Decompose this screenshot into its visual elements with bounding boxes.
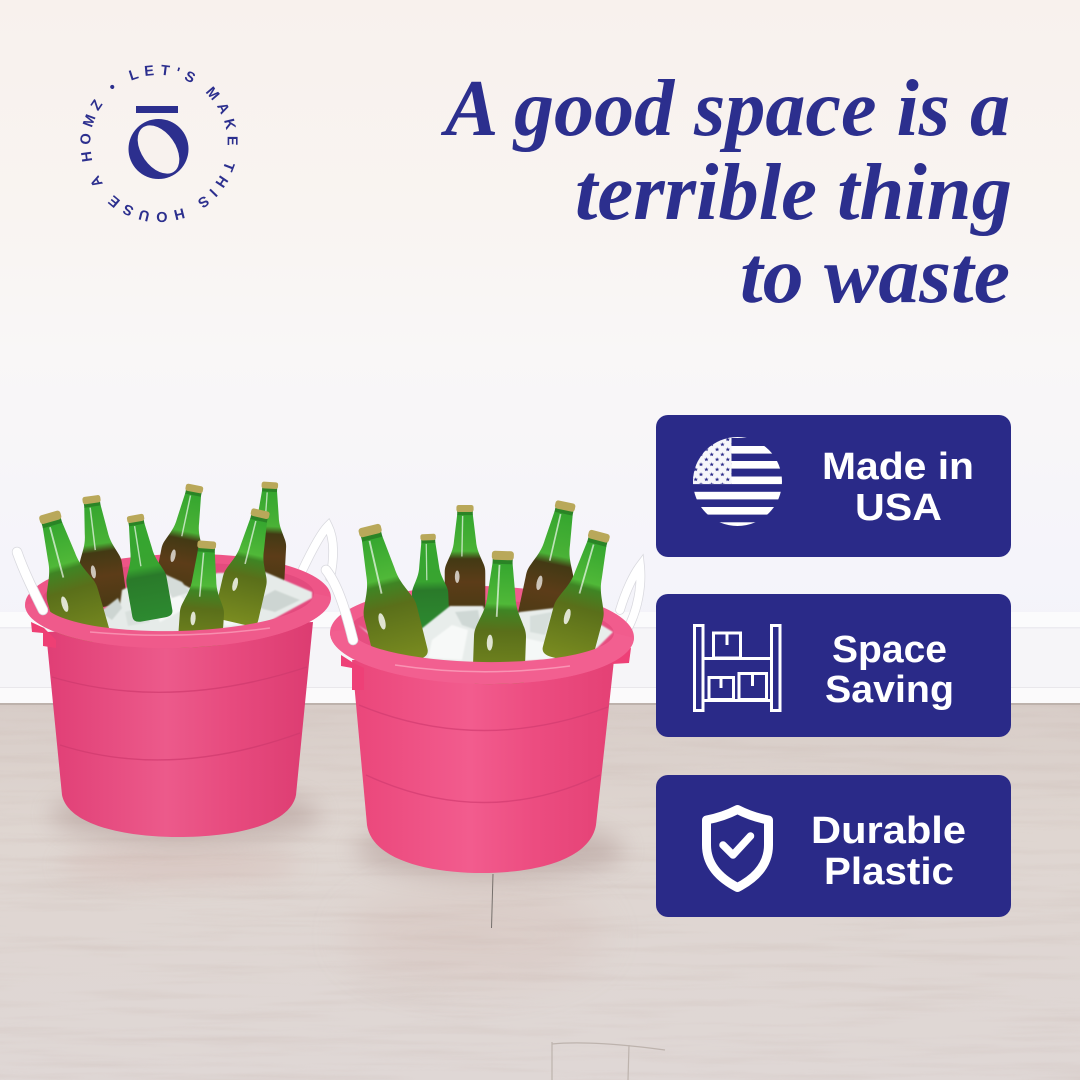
background: wall — [0, 0, 1080, 705]
label: Durable — [811, 810, 966, 852]
label: Saving — [825, 669, 954, 711]
left tub body — [46, 622, 313, 837]
logo letter o — [128, 118, 188, 181]
icon: shelf with boxes — [694, 626, 780, 710]
left tub back bottles — [70, 481, 289, 609]
left tub lug — [31, 622, 56, 648]
left tub rope handle, right — [302, 526, 333, 578]
label: Made in — [822, 446, 974, 488]
panel: Made in USA — [656, 415, 1011, 557]
panel: Durable Plastic — [656, 775, 1011, 917]
label — [825, 629, 954, 711]
headline line 3: to waste — [740, 232, 1010, 320]
right tub front bottles — [358, 524, 610, 684]
icon: US flag — [693, 437, 782, 526]
left tub front bottles — [39, 508, 270, 648]
left tub rim back and interior — [24, 550, 332, 652]
right tub lugs — [341, 648, 631, 690]
left tub bottles and ice — [39, 482, 313, 648]
icon: shield with check — [706, 810, 768, 888]
label — [811, 810, 966, 893]
left tub rope handle, left — [17, 552, 43, 610]
panel: Space Saving — [656, 594, 1011, 737]
left tub rim front — [25, 593, 331, 648]
label: Space — [832, 629, 947, 671]
baseboard — [0, 612, 1080, 704]
right tub with bottles — [326, 497, 640, 873]
label: USA — [855, 487, 942, 529]
right tub rope handle, left — [326, 570, 353, 640]
left tub with bottles — [17, 481, 333, 837]
right tub ice — [358, 606, 613, 664]
right tub rope handle, right — [620, 566, 640, 630]
label — [822, 446, 974, 529]
right tub rim back and interior — [329, 583, 635, 687]
right tub bottles and ice — [358, 500, 614, 684]
logo macron bar — [136, 106, 178, 113]
floor — [0, 703, 1080, 1080]
right tub ribs — [359, 705, 608, 802]
right tub back bottles — [412, 500, 576, 629]
right tub body — [352, 660, 614, 873]
left tub ice — [85, 572, 312, 632]
shadows under buckets — [50, 787, 625, 878]
label: Plastic — [824, 851, 954, 893]
left tub ribs — [52, 667, 307, 760]
right tub rim front — [330, 629, 634, 684]
headline line 2: terrible thing — [575, 149, 1012, 237]
logo badge — [80, 64, 238, 222]
headline line 1: A good space is a — [440, 65, 1010, 153]
headline — [440, 65, 1012, 320]
logo circular text: LET'S MAKE THIS HOUSE A HOMZ • — [80, 64, 238, 222]
